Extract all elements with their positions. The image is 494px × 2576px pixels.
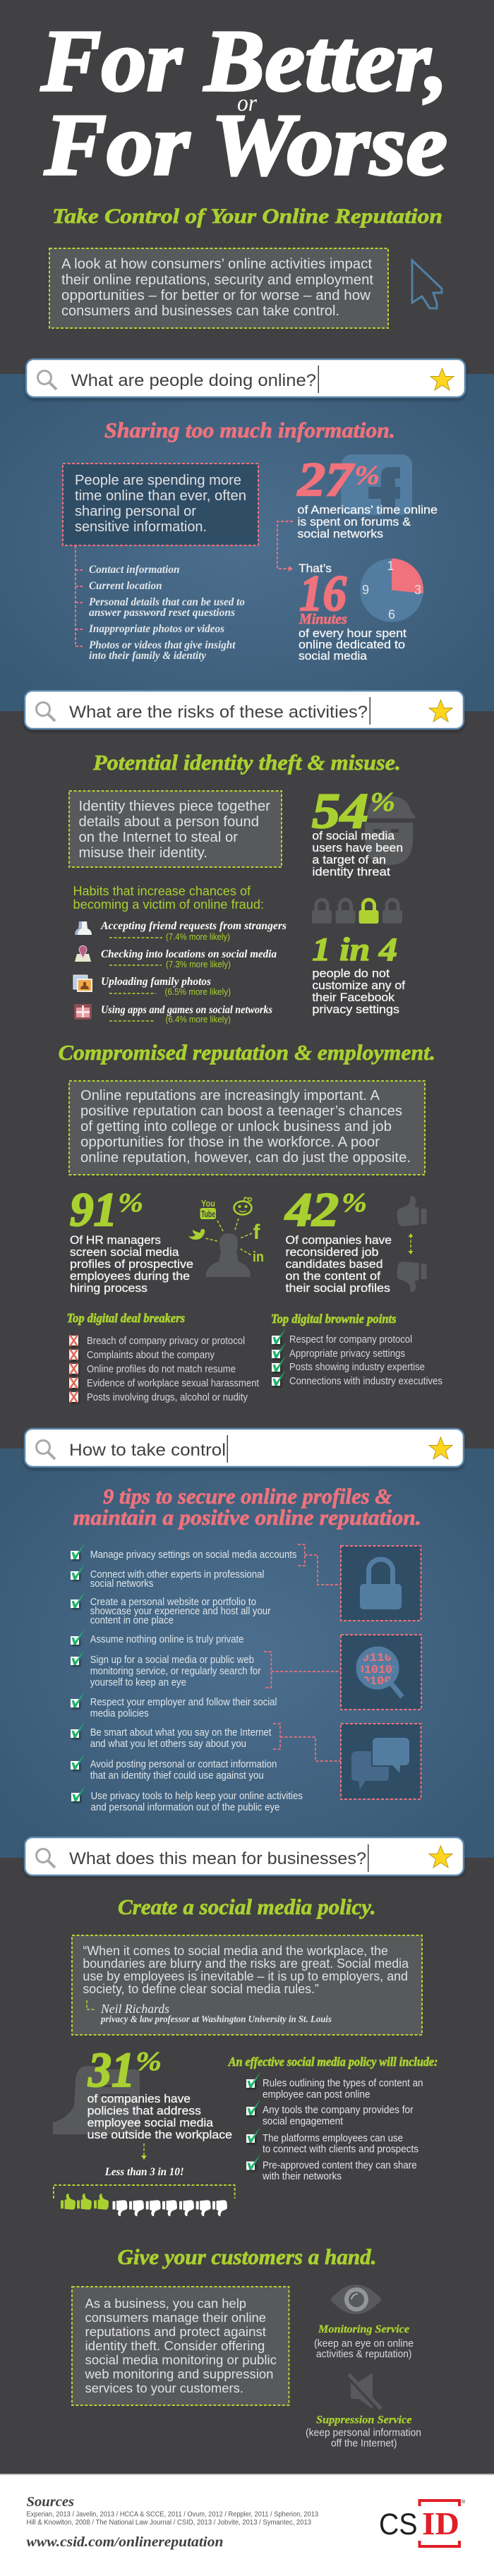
icon: thumb up and down [397,1196,426,1292]
text: monitoring service: (keep an eye on online [314,2338,414,2350]
panel: people are spending more time: sharing personal or [75,504,196,519]
panel: people are spending more time: sensitive information. [75,519,207,535]
text: suppression service [306,2414,421,2450]
chart: clock [360,559,423,622]
list: social media policy: to connect with clients and prospects [263,2143,418,2155]
stat: 27 percent: of Americans’ time online [298,503,438,516]
habit: apps and games: (6.4% more likely) [165,1014,231,1024]
list: deal breakers: Complaints about the company [87,1350,215,1361]
stat: 31 percent: of companies have [88,2092,191,2105]
panel: quote: boundaries are blurry and the risks are great. Social media [83,1957,409,1971]
list: nine tips: Manage privacy settings on social media accounts [90,1549,296,1561]
panel: online reputations [69,1081,425,1175]
panel: online reputations: online reputation, however, can do just the opposite. [80,1150,411,1166]
habit: check in [101,948,277,969]
logo: CSID [379,2499,466,2546]
chart: clock: 3 [414,583,421,597]
text: monitoring service: Monitoring Service [318,2323,409,2335]
list: deal breakers [67,1311,259,1403]
stat: 27 percent: 27 [297,452,355,506]
stat: 16 minutes: 16 [299,565,347,622]
stat: 91 percent: % [118,1188,143,1218]
search bar: how to take control [25,1429,464,1469]
search bar: what are people doing online: What are people doing online? [71,371,316,390]
stat: 16 minutes: social media [299,649,368,663]
stat: 1 in 4: their Facebook [312,991,395,1004]
footer: sources: Sources [27,2494,74,2510]
heading: give your customers a hand: Give your customers a hand. [117,2244,377,2269]
list: social media policy: with their networks [262,2171,342,2182]
list: social media policy [228,2055,438,2182]
intro text box: consumers and businesses can take control. [61,303,339,319]
list: shared information: answer password reset questions [89,607,235,619]
list: social media policy: The platforms employees can use [263,2133,403,2144]
logo: CSID: ® [462,2499,466,2505]
icon: muted speaker [347,2373,381,2409]
list: brownie points: Appropriate privacy settings [289,1348,405,1360]
list: brownie points [271,1312,442,1387]
panel: online reputations: opportunities for those in the workforce. A poor [80,1135,380,1150]
stat: 31 percent: policies that address [88,2104,201,2117]
panel: identity thieves: on the Internet to steal or [79,830,238,845]
habit: family photos: (6.5% more likely) [165,986,231,997]
icon: facebook [342,454,412,515]
search bar: what are people doing online [26,359,465,399]
icon: friends [75,921,92,935]
list: deal breakers: Top digital deal breakers [67,1311,185,1325]
list: nine tips: Avoid posting personal or contact information [90,1759,277,1770]
stat: 91 percent: profiles of prospective [70,1257,193,1271]
panel: magnifier on binary code: 010101 [357,1664,399,1677]
intro text box: opportunities – for better or for worse – and how [61,288,371,303]
search bar: what does this mean for businesses [25,1837,464,1877]
panel: quote: use by employees is inevitable – it is up to employers, and [83,1969,408,1983]
panel: lock icon [341,1546,421,1621]
icon: mouse cursor [412,260,442,308]
habit: friend requests: (7.4% more likely) [166,931,230,942]
icon: location pin [75,945,91,962]
stat: 91 percent: hiring process [70,1281,147,1295]
list: brownie points: Top digital brownie points [271,1312,397,1326]
icon: photos [73,975,92,991]
stat: 31 percent: 31 [88,2043,135,2098]
stat: 27 percent: social networks [298,527,383,540]
icon: padlocks [312,900,402,924]
panel: identity thieves: misuse their identity. [79,845,207,861]
panel: identity thieves [69,791,282,867]
heading: habits [73,884,264,912]
text: suppression service: off the Internet) [331,2437,397,2450]
icon: person with social networks: f [253,1221,261,1244]
list: shared information: Inappropriate photos or videos [88,623,224,635]
stat: 42 percent: candidates based [285,1257,382,1271]
panel: speech bubbles [341,1724,421,1799]
panel: online reputations: positive reputation can boost a teenager’s chances [80,1103,402,1119]
list: nine tips: social networks [90,1578,153,1590]
stat: 27 percent: is spent on forums & [298,515,411,528]
search bar: risks of these activities: What are the risks of these activities? [69,703,368,722]
icon: hacker [363,796,415,865]
search bar: how to take control: How to take control [69,1441,226,1460]
list: shared information: into their family & identity [89,650,207,662]
stat: 42 percent: 42 [284,1183,339,1236]
panel: as a business: reputations and protect against [85,2325,266,2339]
intro text box: their online reputations, security and employment [61,272,373,288]
panel: people are spending more time [63,464,258,545]
habit: friend requests: Accepting friend requests from strangers [100,920,287,932]
list: nine tips: showcase your experience and host all your [90,1606,271,1617]
title: For Worse [44,97,447,194]
stat: 27 percent: % [354,461,380,490]
panel: identity thieves: Identity thieves piece together [79,799,270,814]
footer: sources: Hill & Knowlton, 2008 / The National Law Journal / CSID, 2013 / Jobvite, 2013 / Symantec, 2013 [27,2518,311,2527]
habit: friend requests [100,920,287,942]
stat: 31 percent: % [135,2047,162,2076]
panel: quote: society, to define clear social media rules.” [83,1982,319,1996]
habit: check in: Checking into locations on social media [101,948,277,960]
list: nine tips: monitoring service, or regularly search for [90,1666,261,1677]
footer: url: www.csid.com/onlinereputation [27,2534,223,2550]
stat: 16 minutes: online dedicated to [299,638,405,651]
list: nine tips: Use privacy tools to help keep your online activities [91,1791,303,1802]
list: shared information [76,545,245,662]
list: nine tips: media policies [90,1708,149,1719]
list: social media policy: social engagement [263,2116,343,2127]
search bar: what does this mean for businesses: What does this mean for businesses? [69,1849,366,1868]
stat: 91 percent: screen social media [70,1245,179,1259]
panel: magnifier on binary code [341,1635,421,1710]
chart: thumbs out of ten [54,2185,235,2216]
list: nine tips: Respect your employer and follow their social [90,1697,277,1708]
icon: person with policy document [53,2066,140,2134]
stat: 27 percent [297,452,438,540]
text: suppression service: Suppression Service [316,2414,412,2426]
panel: as a business: web monitoring and suppression [84,2367,274,2381]
stat: 16 minutes: That’s [299,562,332,575]
list: deal breakers: Posts involving drugs, alcohol or nudity [87,1392,248,1403]
list: nine tips: that an identity thief could use against you [90,1770,264,1782]
text: monitoring service [314,2323,414,2360]
text: monitoring service: activities & reputation) [316,2348,412,2360]
panel: quote [72,1935,422,2035]
intro text box [49,248,388,328]
stat: 54 percent: users have been [312,841,403,854]
stat: 31 percent: use outside the workplace [88,2128,232,2141]
list: social media policy: Pre-approved content they can share [263,2160,417,2172]
chart: clock: 6 [388,607,395,622]
habit: apps and games: Using apps and games on social networks [101,1004,272,1016]
stat: 91 percent: employees during the [70,1269,190,1283]
list: deal breakers: Online profiles do not match resume [87,1364,236,1375]
panel: magnifier on binary code: 101001 [355,1675,399,1688]
stat: 31 percent [88,2043,232,2141]
title: or [237,90,258,116]
stat: 91 percent: 91 [70,1183,117,1236]
stat: 16 minutes: of every hour spent [299,627,406,640]
list: nine tips: Assume nothing online is truly private [90,1634,244,1645]
title [40,13,448,194]
list: deal breakers: Evidence of workplace sexual harassment [87,1378,259,1389]
stat: 54 percent: of social media [312,829,395,842]
callout: less than 3 in 10: Less than 3 in 10! [104,2166,184,2178]
list: nine tips: yourself to keep an eye [90,1677,186,1688]
panel: as a business: social media monitoring or public [85,2353,277,2367]
panel: quote: Neil Richards [100,2002,169,2016]
stat: 42 percent: reconsidered job [285,1245,378,1259]
heading: create a social media policy: Create a social media policy. [118,1894,376,1919]
list: brownie points: Respect for company protocol [289,1334,412,1346]
list: shared information: Photos or videos that give insight [88,639,236,651]
arrow: down to less than 3 in 10 [141,2143,147,2160]
icon: eye [330,2285,382,2314]
icon: person with social networks: You [201,1198,215,1209]
panel: people are spending more time: time online than ever, often [75,488,246,504]
habit: family photos [101,976,231,997]
stat: 42 percent [284,1183,392,1295]
stat: 16 minutes [299,562,406,663]
stat: 54 percent: a target of an [312,853,386,866]
logo: CSID: CS [379,2508,418,2541]
intro text box: A look at how consumers’ online activities impact [61,257,372,272]
heading: 9 tips [73,1484,421,1530]
panel: as a business: services to your customers. [85,2381,243,2395]
heading: sharing too much information: Sharing too much information. [104,418,395,442]
stat: 54 percent: identity threat [312,865,390,878]
panel: as a business: consumers manage their online [85,2311,266,2325]
list: shared information: Current location [89,580,162,592]
list: nine tips: Create a personal website or portfolio to [90,1597,256,1608]
title: For Better, [40,13,448,110]
panel: online reputations: of getting into college or unlock business and job [80,1119,392,1135]
panel: identity thieves: details about a person found [79,814,259,830]
panel: as a business: identity theft. Consider offering [85,2339,265,2353]
stat: 42 percent: on the content of [285,1269,380,1283]
panel: magnifier on binary code: 001101 [354,1652,399,1665]
stat: 31 percent: employee social media [88,2116,214,2129]
list: nine tips: content in one place [90,1615,174,1626]
list: shared information: Personal details that can be used to [88,596,245,608]
heading: potential identity theft: Potential identity theft & misuse. [92,750,401,775]
stat: 54 percent: 54 [312,784,368,839]
heading: 9 tips: 9 tips to secure online profiles & [103,1484,392,1508]
search bar: risks of these activities [25,691,464,731]
list: brownie points: Posts showing industry expertise [289,1362,425,1373]
stat: 1 in 4: customize any of [312,979,405,992]
footer: sources: Experian, 2013 / Javelin, 2013 / HCCA & SCCE, 2011 / Ovum, 2012 / Reppler, 2011 / Spherion, 2013 [27,2510,318,2519]
heading: habits: Habits that increase chances of [73,884,251,898]
stat: 16 minutes: Minutes [299,610,347,627]
list: social media policy: An effective social media policy will include: [228,2055,438,2069]
list: nine tips: Sign up for a social media or public web [90,1655,254,1666]
chart: clock: 9 [362,583,369,597]
logo: CSID: ID [422,2505,459,2541]
list: nine tips: and personal information out of the public eye [91,1802,279,1813]
subtitle: Take Control of Your Online Reputation [52,205,442,228]
stat: 1 in 4: people do not [312,967,390,980]
list: shared information: Contact information [89,564,180,576]
list: brownie points: Connections with industry executives [289,1376,442,1387]
icon: person with social networks [188,1197,264,1277]
icon: person with social networks: Tube [201,1209,215,1219]
stat: 1 in 4: privacy settings [312,1003,399,1016]
stat: 42 percent: % [342,1188,367,1218]
list: nine tips [71,1544,303,1813]
list: social media policy: employee can post online [263,2089,370,2100]
habit: check in: (7.3% more likely) [166,959,231,969]
text: suppression service: (keep personal information [306,2427,421,2439]
chart: clock: 1 [387,559,394,573]
heading: habits: becoming a victim of online fraud: [73,897,264,912]
stat: 91 percent [70,1183,193,1295]
habit: family photos: Uploading family photos [101,976,211,988]
stat: 1 in 4: 1 in 4 [312,931,397,968]
panel: people are spending more time: People are spending more [75,473,241,488]
list: social media policy: Rules outlining the types of content an [263,2078,423,2089]
stat: 42 percent: their social profiles [285,1281,390,1295]
panel: as a business [72,2287,289,2405]
connectors: tips to panels [264,1544,341,1761]
list: nine tips: Be smart about what you say on the Internet [90,1727,271,1739]
footer: sources [27,2494,318,2527]
arrow: 27 percent to 16 minutes [277,521,293,572]
stat: 42 percent: Of companies have [285,1233,392,1247]
list: social media policy: Any tools the company provides for [263,2105,414,2116]
heading: 9 tips: maintain a positive online reputation. [73,1505,421,1530]
habit: apps and games [101,1004,272,1024]
stat: 91 percent: Of HR managers [70,1233,161,1247]
list: deal breakers: Breach of company privacy or protocol [87,1336,245,1347]
heading: compromised reputation: Compromised reputation & employment. [59,1040,435,1065]
list: nine tips: and what you let others say about you [90,1739,246,1750]
panel: quote: privacy & law professor at Washington University in St. Louis [100,2014,332,2024]
panel: quote: “When it comes to social media and the workplace, the [83,1944,388,1958]
list: nine tips: Connect with other experts in professional [90,1569,264,1580]
panel: as a business: As a business, you can help [85,2297,246,2311]
stat: 54 percent: % [370,787,395,817]
icon: gift [74,1004,92,1020]
stat: 1 in 4 [312,931,405,1016]
icon: person with social networks: in [253,1250,264,1265]
stat: 54 percent [312,784,403,878]
panel: online reputations: Online reputations are increasingly important. A [80,1088,380,1103]
